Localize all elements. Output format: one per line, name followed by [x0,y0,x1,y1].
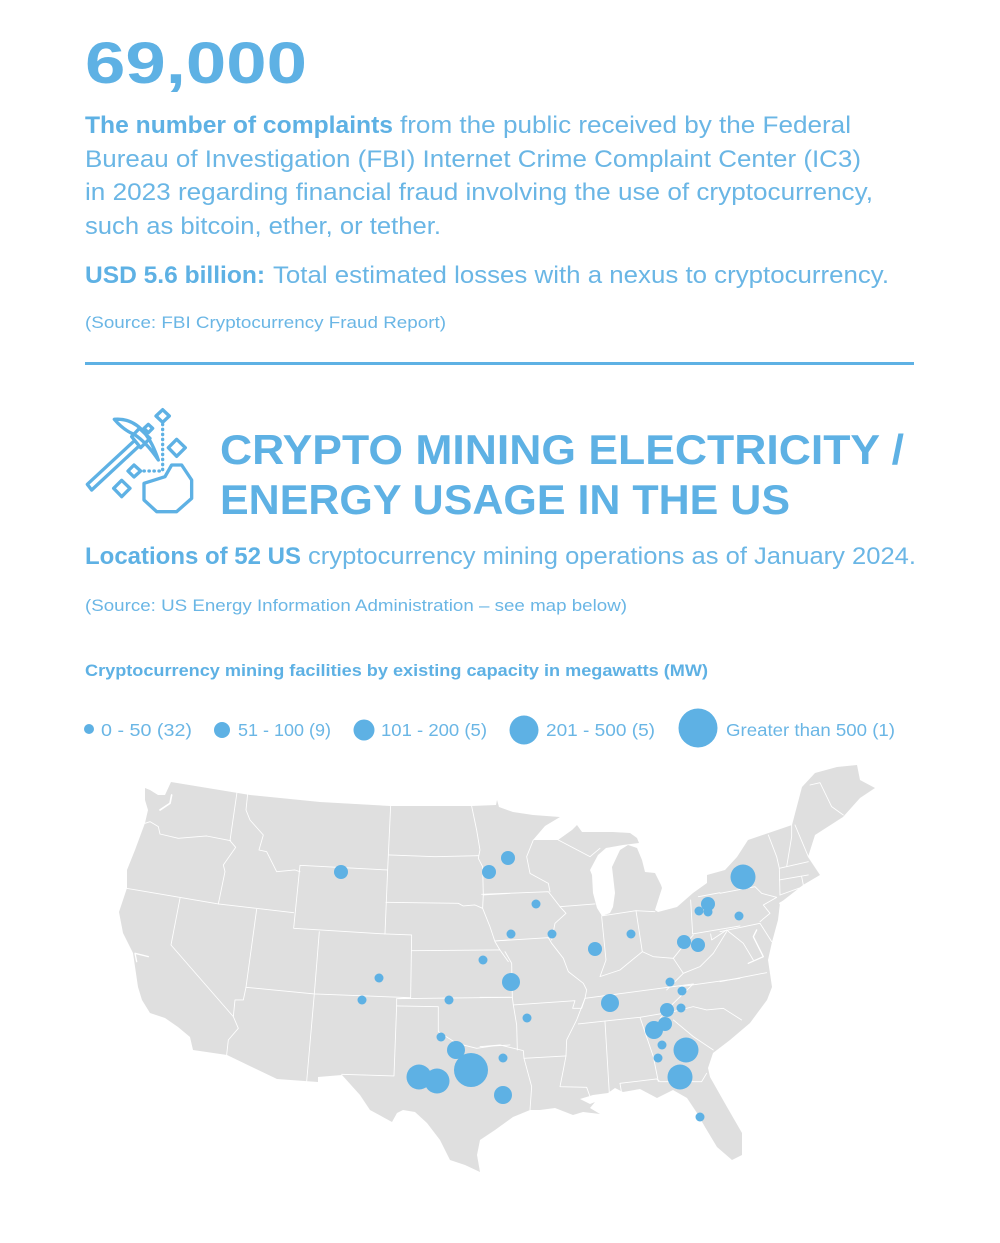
facility markers [334,851,756,1122]
text block: locations of mining operations: Locations of 52 US [85,543,301,570]
text block: locations of mining operations: cryptocurrency mining operations as of January 2024. [308,543,916,570]
text block: complaints description [85,112,873,240]
state borders west [127,792,510,1082]
text block: complaints description: The number of complaints [85,112,393,139]
divider rule [85,362,914,365]
source note: FBI report: (Source: FBI Cryptocurrency Fraud Report) [85,313,446,332]
legend: capacity sizes: 0 - 50 (32) [101,720,192,740]
heading: crypto mining electricity / energy usage: CRYPTO MINING ELECTRICITY / [220,426,904,473]
state borders east [480,840,753,1110]
text block: total estimated losses: Total estimated losses with a nexus to cryptocurrency. [273,262,889,289]
legend: capacity sizes [84,708,895,748]
chart subtitle: Cryptocurrency mining facilities by existing capacity in megawatts (MW) [85,662,708,680]
icon: pickaxe, rock and diamonds [87,410,192,512]
source note: EIA: (Source: US Energy Information Administration – see map below) [85,596,627,615]
legend: capacity sizes: 201 - 500 (5) [546,720,655,740]
text block: complaints description: from the public received by the Federal [400,112,851,139]
map: US states with mining facilities [119,765,875,1172]
state borders northeast [720,783,843,982]
legend: capacity sizes: Greater than 500 (1) [726,720,895,740]
text block: complaints description: Bureau of Investigation (FBI) Internet Crime Complaint Center (IC3) [85,146,861,173]
legend: capacity sizes: 51 - 100 (9) [238,720,331,740]
land mass [119,765,875,1172]
legend: capacity sizes: 101 - 200 (5) [381,720,487,740]
text block: total estimated losses: USD 5.6 billion: [85,262,265,289]
heading: crypto mining electricity / energy usage [220,426,904,523]
text block: complaints description: in 2023 regarding financial fraud involving the use of cryptocurrency, [85,179,873,206]
heading: crypto mining electricity / energy usage: ENERGY USAGE IN THE US [220,476,790,523]
big number: 69,000: 69,000 [85,31,307,96]
text block: complaints description: such as bitcoin, ether, or tether. [85,213,441,240]
